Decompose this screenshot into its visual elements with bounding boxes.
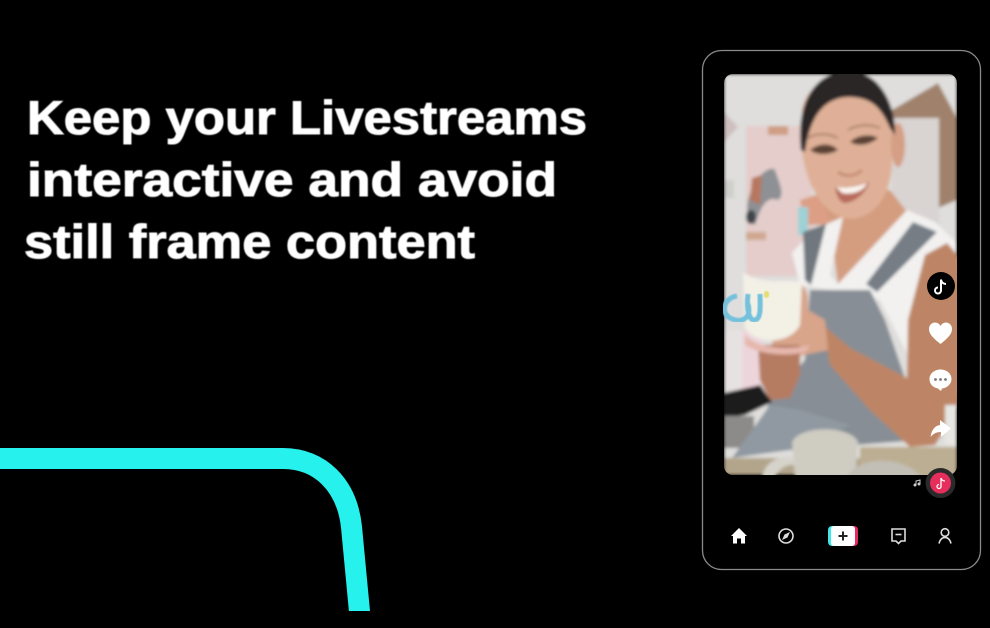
skin: right arm	[823, 243, 968, 447]
photo: woman holding a mug	[724, 71, 968, 478]
lower body and table	[724, 385, 772, 418]
icon: inbox	[892, 529, 905, 544]
teal sticker	[724, 291, 769, 320]
foreground mugs	[792, 429, 858, 478]
white tank top	[791, 210, 957, 352]
overalls bib	[766, 288, 906, 446]
face features	[810, 144, 838, 154]
icon: home	[731, 528, 747, 544]
icon: heart	[929, 322, 952, 344]
icon: create button	[828, 526, 858, 546]
icon: profile	[939, 529, 951, 544]
title: Keep your Livestreams	[27, 91, 587, 144]
bottom navigation bar	[731, 526, 951, 546]
cyan curved line	[0, 458, 360, 622]
cup and hands	[770, 285, 828, 358]
title: interactive and avoid	[27, 153, 557, 206]
icon: share arrow	[930, 420, 951, 437]
icon: tiktok badge	[927, 272, 955, 300]
hair	[800, 71, 895, 152]
icon: comment	[930, 370, 952, 391]
icon: music notes	[914, 480, 920, 486]
overalls straps	[803, 224, 826, 285]
title: still frame content	[24, 215, 475, 268]
icon: music disc	[926, 468, 956, 498]
phone frame	[702, 50, 980, 570]
icon: compass	[779, 529, 793, 543]
head	[802, 76, 893, 219]
skin: neck and chest	[818, 190, 907, 285]
title	[24, 91, 587, 268]
